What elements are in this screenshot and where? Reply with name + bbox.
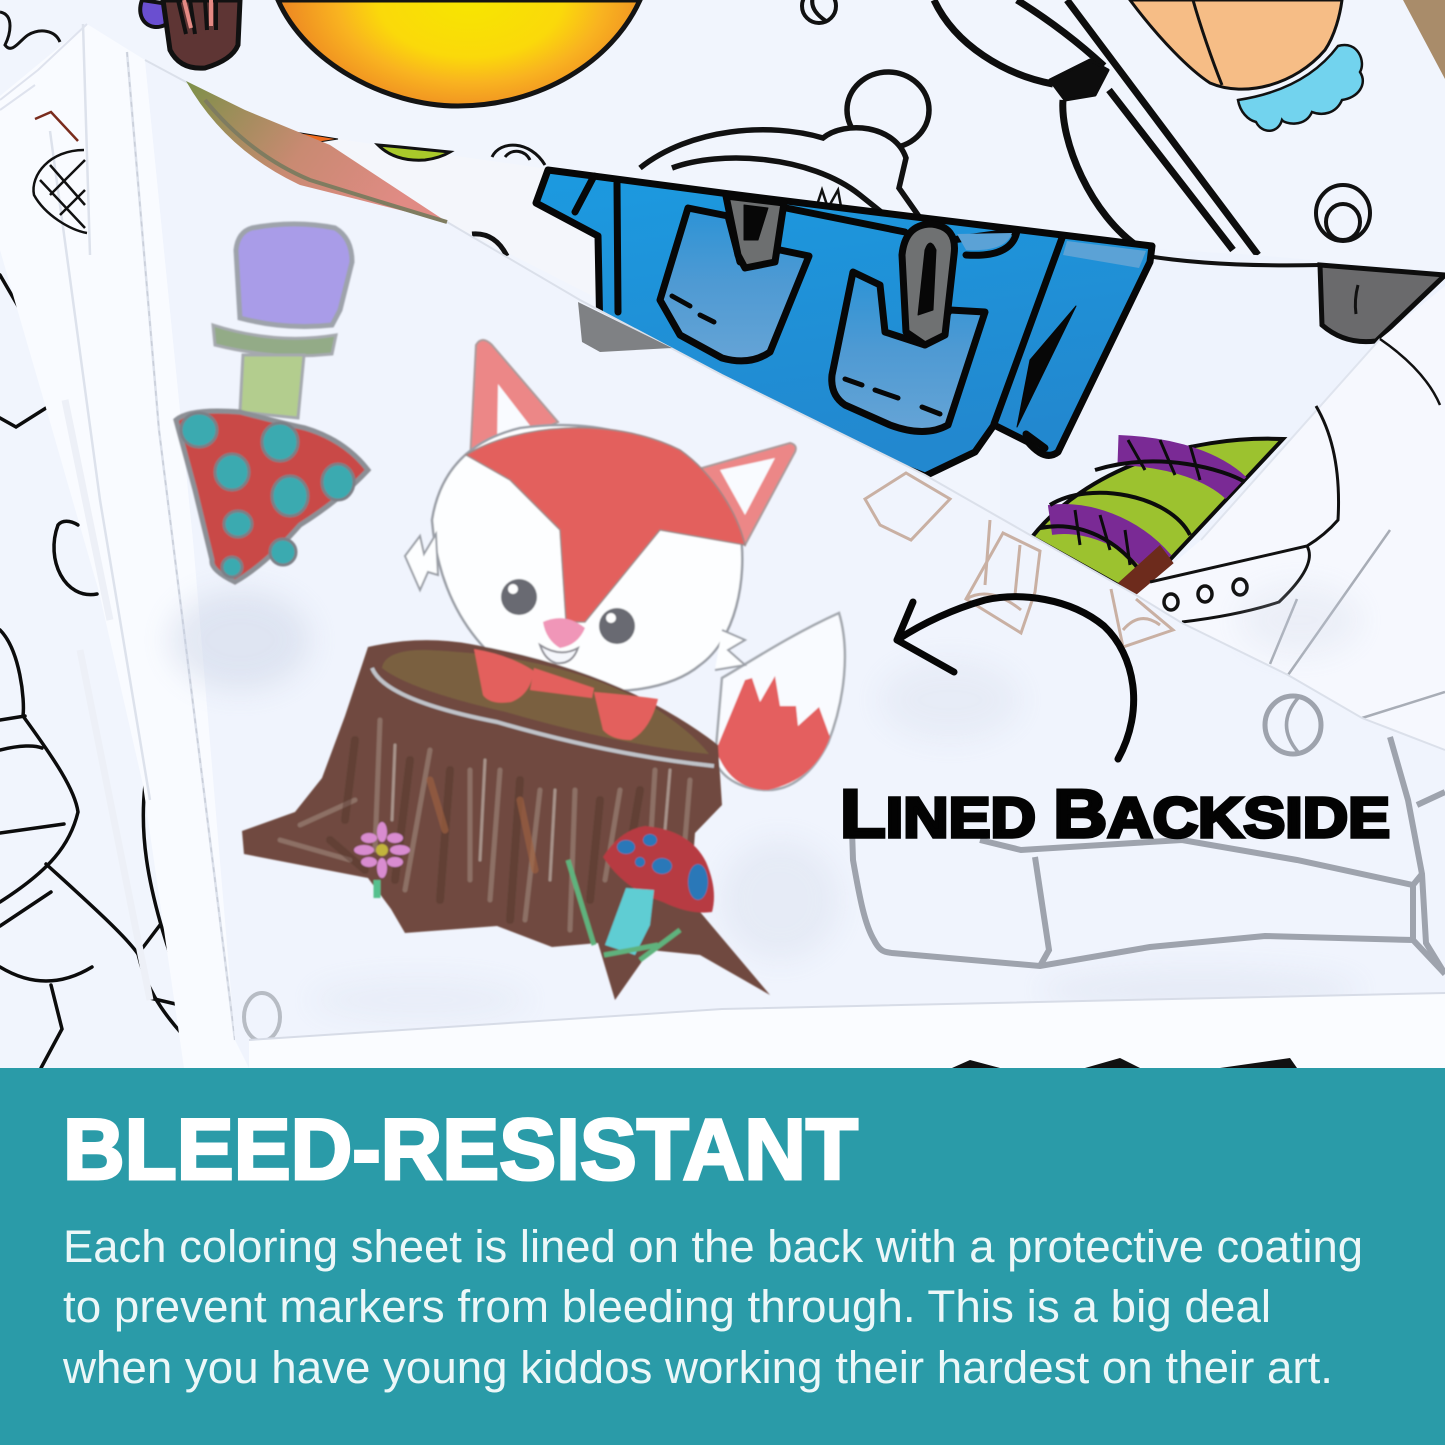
icon: blue backpack: [536, 170, 1152, 476]
panel: lined backside fabric: [145, 60, 1445, 1068]
faint brown log outlines: [865, 473, 1173, 647]
grey corner show-through: [578, 302, 672, 352]
fabric shading: [170, 585, 1360, 1022]
stitch dashes: [672, 296, 940, 414]
flap underside: [258, 120, 640, 320]
leaf show-through at fold: [186, 81, 447, 222]
fox ears: [470, 340, 558, 462]
body text: when you have young kiddos working their hardest on their art.: [62, 1342, 1333, 1393]
fox nose: [543, 618, 585, 648]
stump top: [382, 650, 709, 754]
buckle right: [902, 224, 954, 345]
left sheet doodles: [0, 275, 184, 1068]
photo: fabric coloring sheets: [0, 0, 1445, 1068]
pocket left: [660, 208, 809, 361]
small flower: [354, 822, 410, 898]
illustration: bottle with dots: [176, 224, 368, 582]
buckle left: [726, 196, 784, 268]
icon: scissors outline: [934, 0, 1258, 255]
icon: grey buckle: [1320, 265, 1445, 342]
panel: teal caption band: [0, 1068, 1445, 1445]
fox head: [432, 425, 742, 692]
fox tail: [715, 613, 845, 790]
icon: acorn doodle: [140, 0, 240, 68]
icon: top ring: [802, 0, 836, 23]
doodle: lime shape: [378, 145, 450, 160]
side strap: [994, 238, 1062, 424]
rolled right sheet: [1136, 286, 1445, 750]
fox red mask: [466, 428, 745, 622]
hem band at bottom: [249, 993, 1445, 1068]
icon: hand with blue cuff: [1130, 0, 1363, 131]
fox paws: [474, 649, 534, 703]
arrow: curved pointer to the fabric: [897, 597, 1134, 759]
icon: green and purple leaf: [1032, 439, 1283, 596]
label: lined backside: LINED BACKSIDE: [840, 776, 1390, 852]
body text: [62, 1221, 1363, 1393]
illustration: fox in stump: [242, 340, 845, 1000]
small mushroom: [603, 826, 714, 913]
icon: squiggle doodle: [0, 12, 60, 48]
icon: compass outline: [640, 72, 929, 225]
icon: eye ring: [1316, 185, 1370, 241]
heading: BLEED-RESISTANT: [63, 1102, 858, 1198]
faint ring and smudges: [244, 993, 280, 1041]
stump body: [242, 640, 770, 1000]
left hem strip: [0, 24, 249, 1068]
faint show-through outlines: [851, 696, 1445, 974]
right sheet under blue fold: [1000, 246, 1445, 760]
wood table corner: [1403, 0, 1445, 79]
icon: coloured sun: [278, 0, 640, 106]
top band: [786, 208, 1017, 255]
fox eyes: [501, 579, 537, 615]
body text: to prevent markers from bleeding through. This is a big deal: [63, 1281, 1271, 1332]
body text: Each coloring sheet is lined on the back with a protective coating: [63, 1221, 1363, 1272]
top sheet drawings: [0, 0, 1445, 255]
pocket right: [832, 272, 985, 432]
doodle: corn outline: [33, 150, 87, 233]
